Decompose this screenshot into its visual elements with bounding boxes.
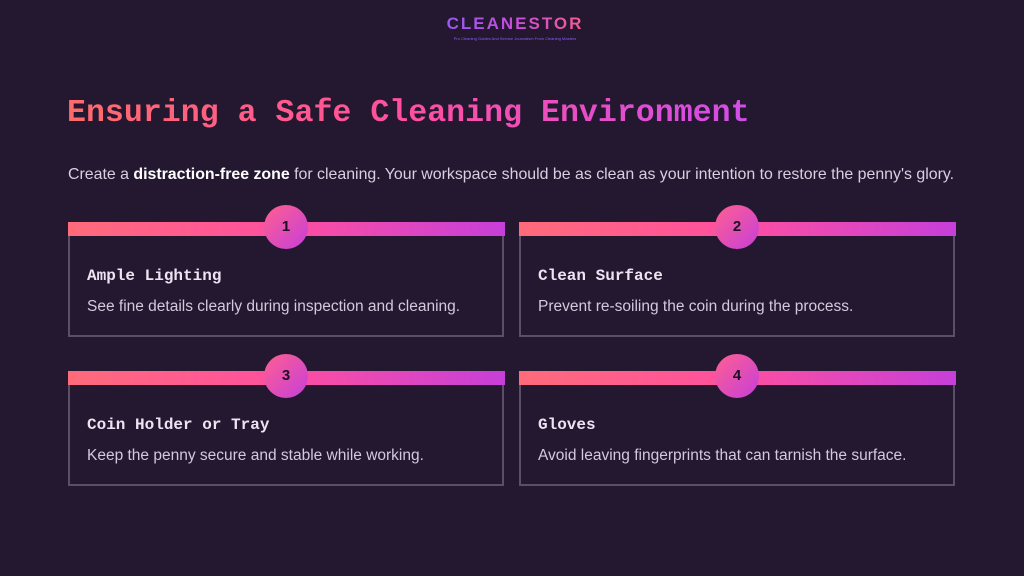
card 3: 3 <box>282 367 290 384</box>
logo: Pro Cleaning Guides And Service Journalism From Cleaning Masters <box>454 36 576 41</box>
card 4: Avoid leaving fingerprints that can tarnish the surface. <box>538 447 906 464</box>
title: Ensuring a Safe Cleaning Environment <box>67 96 750 131</box>
card 3: Coin Holder or Tray <box>87 416 269 434</box>
card 4: 4 <box>733 367 741 384</box>
card 1 <box>68 205 505 337</box>
card 1: See fine details clearly during inspection and cleaning. <box>87 298 460 315</box>
card 2 <box>519 205 956 337</box>
card 1: 1 <box>282 218 290 235</box>
card 2: Clean Surface <box>538 267 663 285</box>
card 1: Ample Lighting <box>87 267 221 285</box>
card 3 <box>68 354 505 486</box>
card 4 <box>519 354 956 486</box>
card 3: Keep the penny secure and stable while working. <box>87 447 424 464</box>
subtitle: Create a distraction-free zone for cleaning. Your workspace should be as clean as your intention to restore the penny's glory. <box>68 166 954 183</box>
card 2: 2 <box>733 218 741 235</box>
card 4: Gloves <box>538 416 596 434</box>
logo: CLEANESTOR <box>447 14 583 33</box>
card 2: Prevent re-soiling the coin during the process. <box>538 298 853 315</box>
